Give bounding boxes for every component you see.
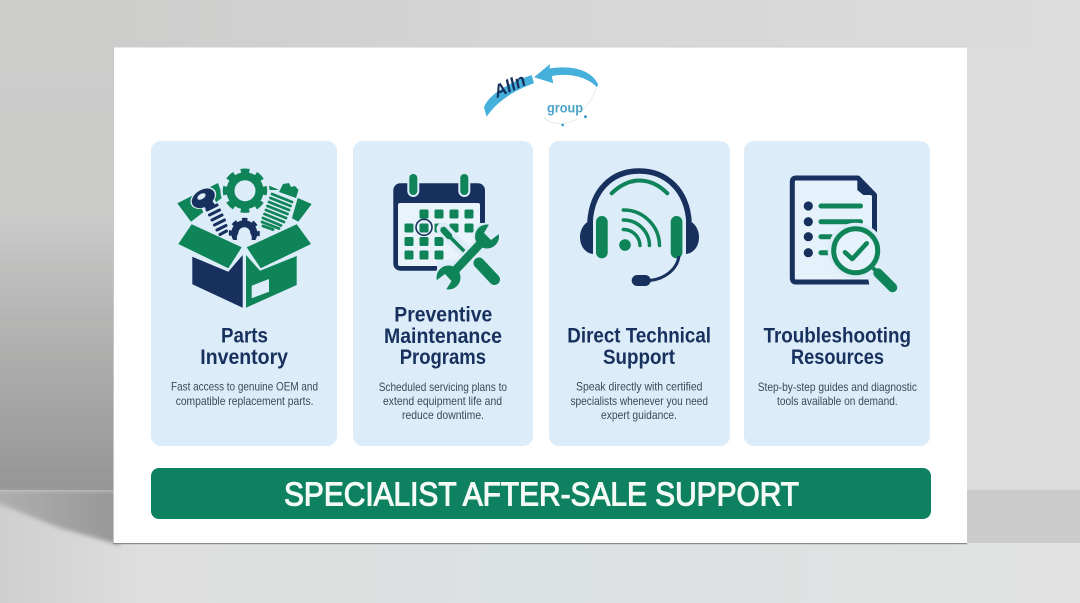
description: reduce downtime. [402,408,484,422]
heading: Maintenance [384,325,502,348]
description [171,380,318,408]
description [758,380,917,408]
description: specialists whenever you need [570,394,708,408]
logo wordmark: Alln [490,70,529,102]
heading [200,325,288,369]
description [379,380,507,422]
description [570,380,708,422]
banner [151,468,931,519]
logo swoosh arrow [484,64,598,123]
heading: Programs [400,346,486,369]
description: expert guidance. [601,408,677,422]
description: extend equipment life and [383,394,502,408]
heading [567,325,711,369]
description: tools available on demand. [777,394,898,408]
heading: Direct Technical [567,325,711,348]
description: compatible replacement parts. [176,394,314,408]
logo dots [561,115,587,126]
panel: parts inventory [151,141,337,446]
description: Speak directly with certified [576,380,702,394]
logo [484,64,598,126]
heading: Resources [791,346,884,369]
description: Scheduled servicing plans to [379,380,507,394]
banner title: SPECIALIST AFTER-SALE SUPPORT [284,476,799,513]
heading: Troubleshooting [764,325,911,348]
description: Step-by-step guides and diagnostic [758,380,917,394]
heading: Support [603,346,675,369]
heading [764,325,911,369]
heading: Parts [221,325,268,348]
icon: document with magnifier [792,178,892,288]
icon: headset [580,171,699,286]
white board [113,46,967,544]
heading: Inventory [200,346,288,369]
description: Fast access to genuine OEM and [171,380,318,394]
panel: preventive maintenance [353,141,533,446]
logo group text: group [547,100,583,116]
heading: Preventive [394,304,492,327]
panel: troubleshooting resources [744,141,930,446]
heading [384,304,502,369]
panel: direct technical support [549,141,730,446]
icon: calendar and tools [393,178,503,293]
icon: open box with parts [177,166,312,308]
